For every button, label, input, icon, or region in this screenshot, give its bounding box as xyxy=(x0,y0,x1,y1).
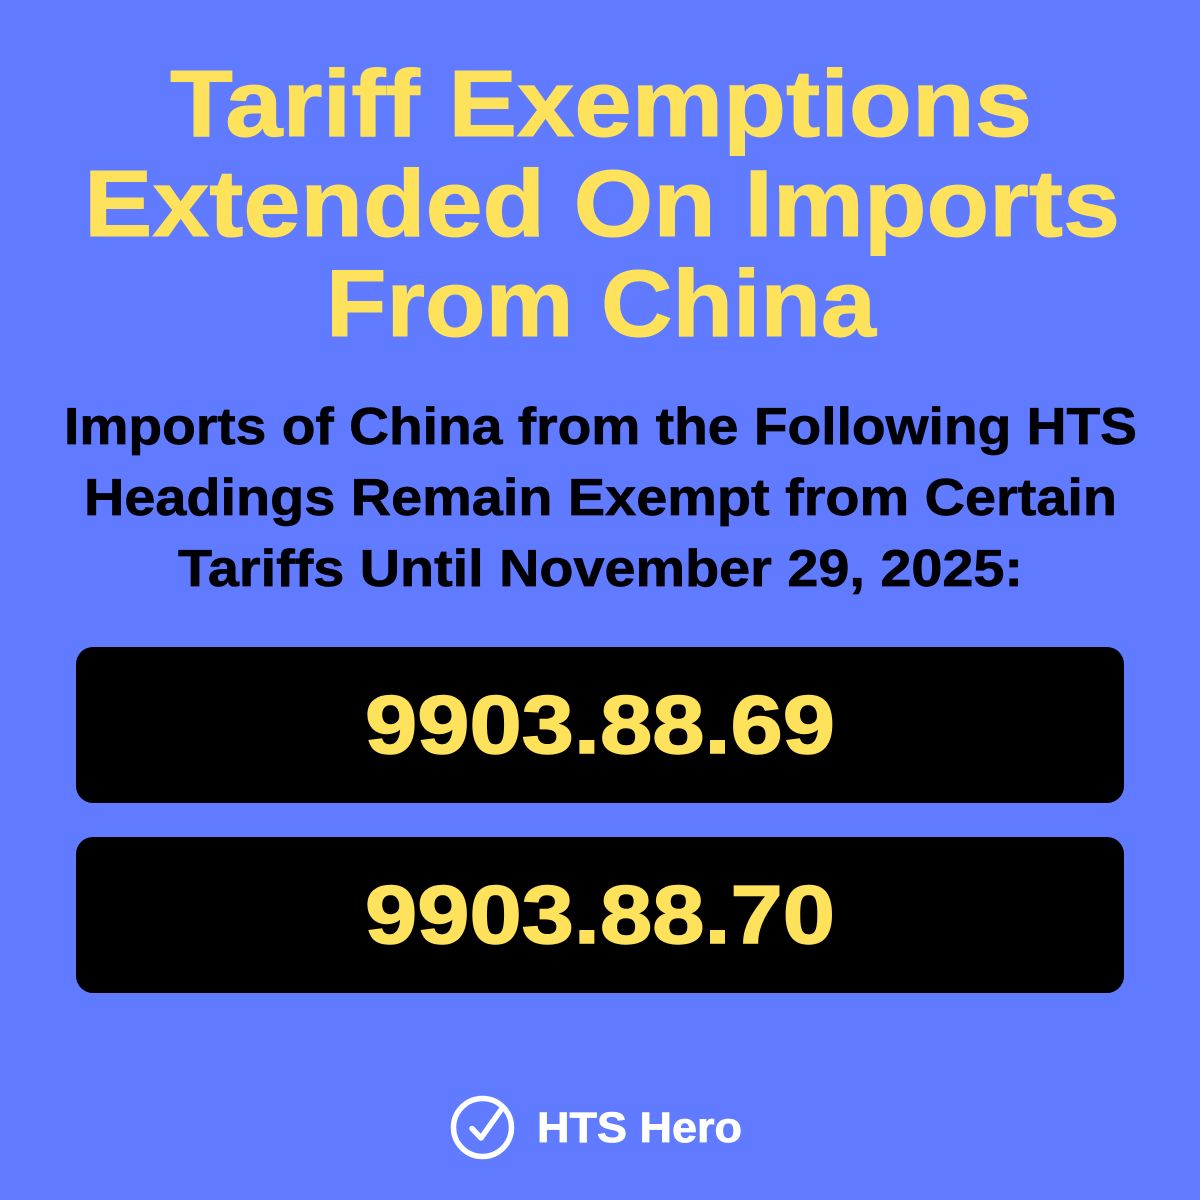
subtitle: Headings Remain Exempt from Certain xyxy=(84,469,1117,527)
HTS code box: 9903.88.69 xyxy=(76,647,1124,803)
subtitle: Imports of China from the Following HTS xyxy=(64,398,1137,456)
icon: check mark in circle xyxy=(454,1098,512,1156)
HTS code box: 9903.88.70: 9903.88.70 xyxy=(365,868,835,961)
title: Extended On Imports xyxy=(84,151,1120,257)
title: Tariff Exemptions xyxy=(170,51,1032,157)
title: From China xyxy=(326,251,877,357)
brand name: HTS Hero xyxy=(537,1104,742,1152)
subtitle: Tariffs Until November 29, 2025: xyxy=(178,540,1023,598)
subtitle xyxy=(64,398,1137,598)
title xyxy=(84,51,1120,357)
HTS code box: 9903.88.70 xyxy=(76,837,1124,993)
HTS code box: 9903.88.69: 9903.88.69 xyxy=(365,678,835,771)
logo: HTS Hero xyxy=(454,1098,742,1156)
